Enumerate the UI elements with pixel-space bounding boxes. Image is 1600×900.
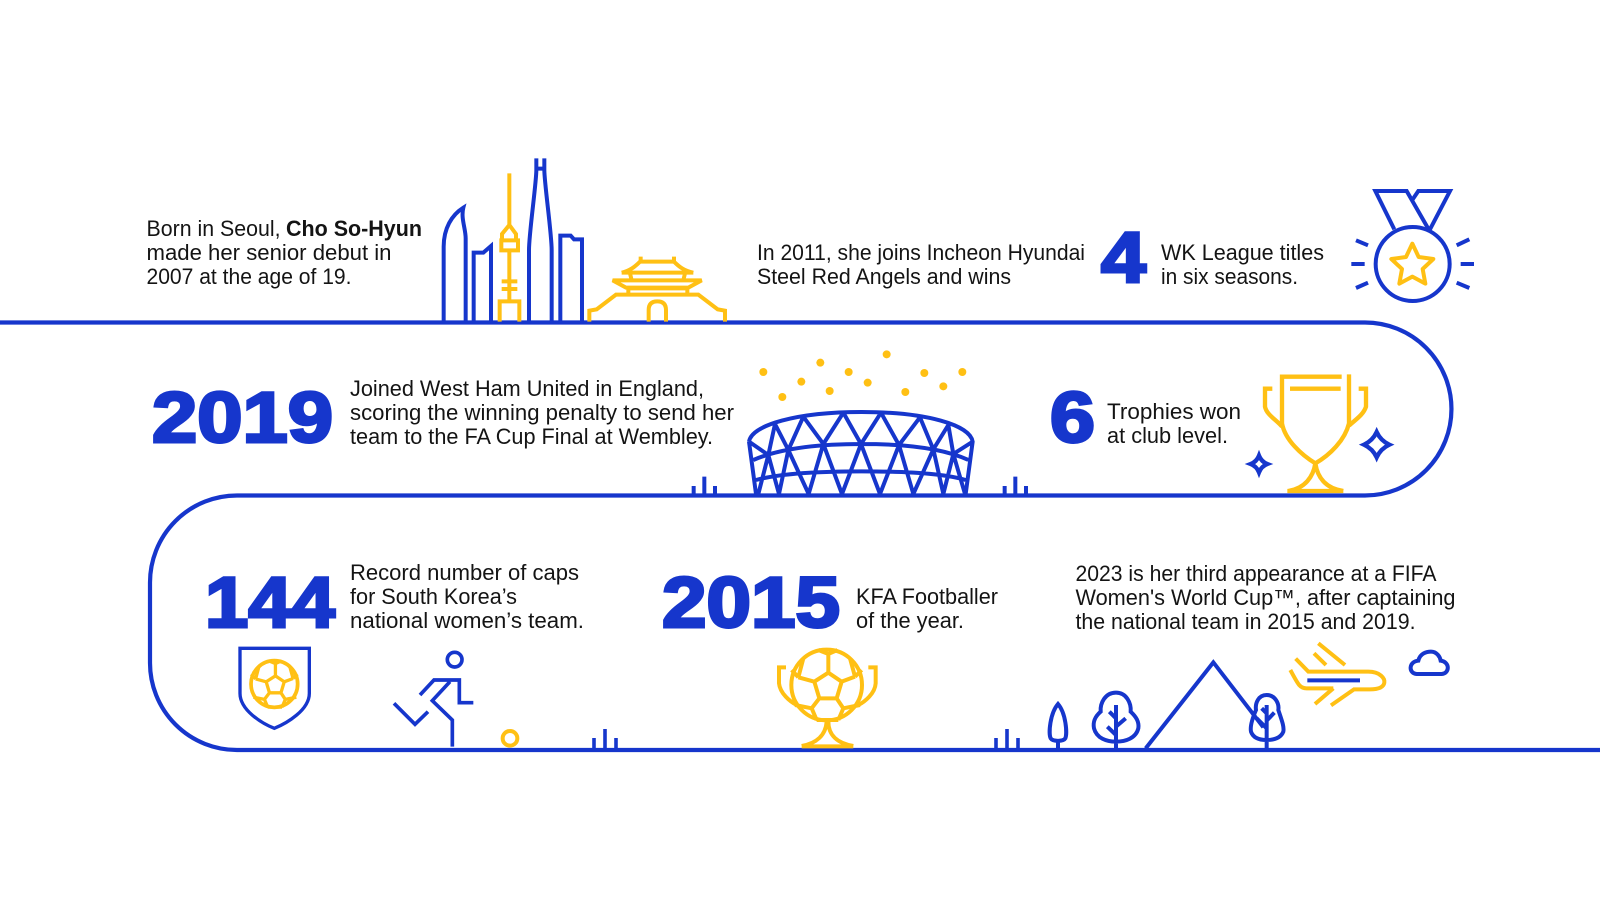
icon: stadium: [694, 350, 1026, 495]
text: record caps: [350, 560, 584, 633]
number: 2015: 2015: [662, 564, 840, 643]
text: trophies: at club level.: [1107, 423, 1228, 448]
number: 144: 144: [205, 564, 336, 643]
text: KFA footballer: KFA Footballer: [856, 584, 998, 609]
grass tufts: [594, 729, 1018, 750]
text: West Ham: team to the FA Cup Final at Wembley.: [350, 424, 713, 449]
text: birth and debut: 2007 at the age of 19.: [146, 264, 352, 289]
text: record caps: national women’s team.: [350, 608, 584, 633]
text: joins Incheon: In 2011, she joins Incheon Hyundai: [757, 240, 1085, 265]
icon: mountain, trees, plane and cloud: [1050, 643, 1448, 748]
text: West Ham: scoring the winning penalty to send her: [350, 400, 734, 425]
number: 4 titles: 4: [1101, 219, 1147, 298]
text: World Cup: the national team in 2015 and 2019.: [1076, 609, 1416, 634]
text: West Ham: [350, 376, 734, 449]
text: KFA footballer: of the year.: [856, 608, 964, 633]
icon: trophy: [1251, 374, 1389, 491]
text: KFA footballer: [856, 584, 998, 633]
text: birth and debut: Born in Seoul,: [146, 216, 280, 241]
text: record caps: for South Korea’s: [350, 584, 517, 609]
text: WK League titles: in six seasons.: [1161, 264, 1298, 289]
icon: medal: [1351, 191, 1474, 301]
text: record caps: Record number of caps: [350, 560, 579, 585]
text: joins Incheon: Steel Red Angels and wins: [757, 264, 1011, 289]
icons: shield, runner and ball: [240, 648, 517, 747]
text: trophies: [1107, 399, 1241, 448]
icon: Seoul skyline: [444, 158, 725, 322]
text: joins Incheon: [757, 240, 1085, 289]
text: WK League titles: [1161, 240, 1324, 289]
text: birth and debut: Cho So-Hyun: [286, 216, 422, 241]
text: World Cup: [1076, 561, 1456, 634]
text: WK League titles: WK League titles: [1161, 240, 1324, 265]
number: 2019: 2019: [152, 379, 333, 458]
text: World Cup: 2023 is her third appearance at a FIFA: [1076, 561, 1437, 586]
text: West Ham: Joined West Ham United in England,: [350, 376, 704, 401]
timeline path: [0, 322, 1600, 750]
number: 6 trophies: 6: [1050, 379, 1095, 458]
text: birth and debut: [146, 216, 422, 289]
text: trophies: Trophies won: [1107, 399, 1241, 424]
icon: football trophy: [779, 650, 876, 746]
text: birth and debut: made her senior debut in: [146, 240, 392, 265]
text: World Cup: Women's World Cup™, after captaining: [1076, 585, 1456, 610]
